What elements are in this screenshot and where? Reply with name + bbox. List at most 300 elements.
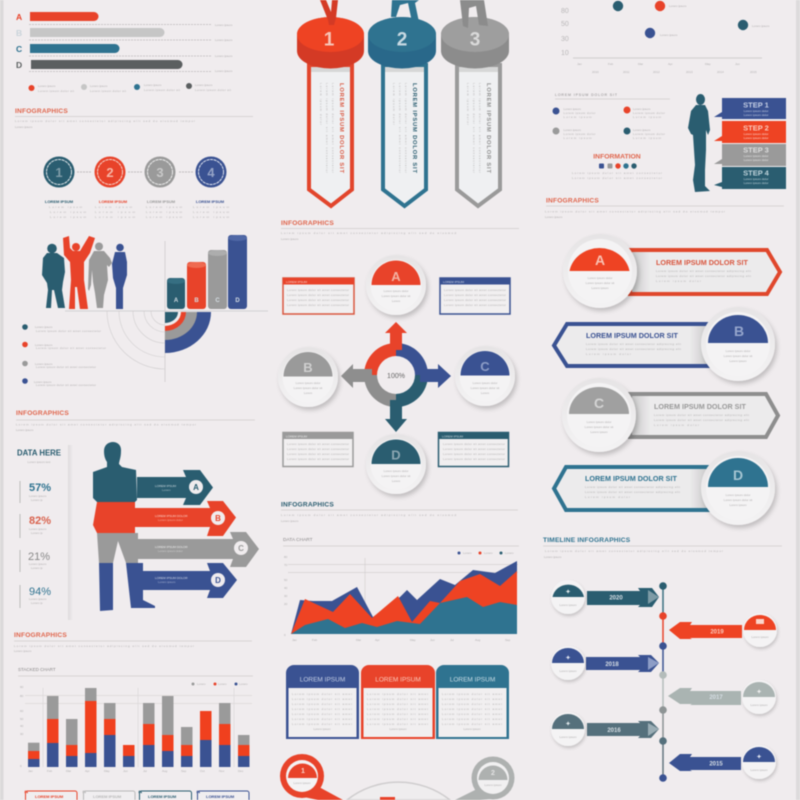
chart legend: Lorem xyxy=(197,682,206,686)
heading: infographics 6: Lorem ipsum xyxy=(545,215,563,219)
badge A xyxy=(366,255,426,315)
card teal: Lorem ipsum dolor sit amet xyxy=(442,702,502,706)
card red: Lorem ipsum dolor sit amet xyxy=(367,722,428,726)
arrow A: Lorem xyxy=(162,488,171,492)
title: data here: Lorem ipsum text xyxy=(27,460,51,464)
badge D: Lorem ipsum dolor sit xyxy=(382,474,410,478)
panel: area chart: 30 xyxy=(284,594,288,598)
card teal: LOREM IPSUM xyxy=(450,676,495,684)
standing silhouette xyxy=(688,94,710,192)
panel: banner A: Lorem ipsum dolor xyxy=(656,279,701,283)
panel: area chart: 40 xyxy=(284,586,288,590)
area series xyxy=(291,561,517,634)
panel: scatter chart: 50 xyxy=(561,21,569,28)
box gray: Lorem ipsum dolor sit amet consectetur xyxy=(287,457,349,461)
badge A: A xyxy=(595,252,605,268)
badge B: Lorem ipsum xyxy=(729,359,747,363)
arrow C: Lorem ipsum dolor xyxy=(158,549,183,553)
bar legend: Lorem ipsum dolor sit xyxy=(38,89,74,93)
man silhouette in four colour bands xyxy=(92,441,156,612)
box teal: LOREM IPSUM xyxy=(442,434,464,438)
stat 21% xyxy=(20,550,50,572)
panel: stacked chart: 50 xyxy=(20,717,24,721)
cylinder A xyxy=(167,278,185,309)
stat 82%: Lorem ip xyxy=(31,531,43,535)
heading: infographics 4 xyxy=(281,220,519,241)
sub heading xyxy=(555,93,670,99)
arrow down xyxy=(385,400,407,432)
badge B xyxy=(701,307,775,381)
panel: timeline xyxy=(551,580,777,782)
step 2: Lorem ipsum xyxy=(95,215,136,219)
badge A: Lorem ipsum xyxy=(591,286,609,290)
bar C: Lorem ipsum xyxy=(215,54,233,58)
title: data here xyxy=(17,448,61,464)
event 2017 xyxy=(668,680,776,714)
event 2015: ✦ xyxy=(756,753,762,761)
card teal: Lorem ipsum dolor sit amet xyxy=(442,697,502,701)
step 3: Lorem ipsum xyxy=(146,215,182,219)
arrow D: LOREM IPSUM DOLOR xyxy=(155,576,188,580)
step 2: LOREM IPSUM xyxy=(99,199,128,204)
heading: infographics 2: Lorem ipsum xyxy=(16,428,34,432)
stat 57%: 57% xyxy=(29,482,51,494)
panel: area chart: 20 xyxy=(284,602,288,606)
stat 57%: Lorem ipsum xyxy=(29,494,47,498)
timeline axis and dots xyxy=(659,582,667,782)
stat 82%: 82% xyxy=(29,515,51,527)
card teal: Lorem ipsum dolor sit amet xyxy=(442,722,502,726)
event 2018: Lorem ipsum xyxy=(559,669,577,673)
heading: infographics 1: Lorem ipsum dolor sit amet consectetur adipiscing elit sed do eiusmod tempor xyxy=(15,119,195,123)
badge B: Lorem ipsum dolor sit xyxy=(294,386,322,390)
bar C: C xyxy=(16,44,22,54)
information block xyxy=(572,154,662,180)
heading: infographics 1 xyxy=(15,108,253,129)
step 3: Lorem ipsum xyxy=(146,210,182,214)
event 2020: Lorem ipsum xyxy=(559,603,577,607)
badge C xyxy=(562,378,636,452)
step 4: Lorem ipsum dolor xyxy=(744,177,768,181)
step 2: Lorem ipsum dolor xyxy=(744,132,768,136)
badge A: Lorem xyxy=(392,299,401,303)
panel: stacked chart: Jul xyxy=(143,769,147,773)
badge A: Lorem ipsum dolor sit xyxy=(382,294,410,298)
stat 82%: Lorem ipsum xyxy=(29,527,47,531)
panel: area chart: Jul xyxy=(450,638,454,642)
four item legend: Lorem ipsum dolor xyxy=(633,111,665,115)
card navy: Lorem ipsum dolor sit amet xyxy=(292,722,352,726)
heading: infographics 6: Lorem ipsum dolor sit amet consectetur adipiscing elit sed do eiusmod tempor xyxy=(545,210,725,214)
quote gray: “ xyxy=(82,789,86,799)
step 1: Lorem ipsum xyxy=(50,210,86,214)
box red: Lorem ipsum dolor sit amet consectetur xyxy=(287,303,349,307)
step 1 xyxy=(44,156,86,219)
step 1: Lorem ipsum xyxy=(49,205,82,209)
badge B: Lorem ipsum dolor xyxy=(296,381,320,385)
badge C: C xyxy=(594,395,604,411)
step 4: Lorem ipsum xyxy=(193,215,230,219)
panel: legend and steps xyxy=(552,93,786,192)
panel: banner C: Lorem ipsum dolor sit amet consectetur adipiscing elit xyxy=(654,418,749,422)
step 3: LOREM IPSUM xyxy=(147,199,176,204)
cylinder D xyxy=(228,235,247,309)
event 2020: 2020 xyxy=(609,596,623,602)
card navy: Lorem ipsum dolor sit amet xyxy=(292,692,352,696)
panel: stacked chart: 60 xyxy=(20,709,24,713)
arrow D: Lorem ipsum xyxy=(158,580,176,584)
heading: timeline infographics: Lorem ipsum xyxy=(544,555,562,559)
red pin xyxy=(280,754,343,800)
figures standing on podiums xyxy=(320,0,488,28)
card teal: Lorem ipsum dolor sit amet xyxy=(442,717,502,721)
heading: infographics 4: Lorem ipsum xyxy=(281,237,299,241)
panel: scatter chart: Feb xyxy=(608,62,614,66)
red pin: 1 xyxy=(301,768,305,775)
heading: infographics 4: INFOGRAPHICS xyxy=(281,220,334,227)
box navy: Lorem ipsum dolor sit amet consectetur xyxy=(444,293,506,297)
bar legend: Lorem ipsum xyxy=(144,83,162,87)
panel: stacked chart: May xyxy=(104,769,110,773)
card red: Lorem ipsum dolor sit amet xyxy=(367,697,428,701)
box red: Lorem ipsum dolor sit amet consectetur xyxy=(287,293,349,297)
scatter dots: Lorem ipsum xyxy=(660,33,678,37)
box navy: LOREM IPSUM xyxy=(443,280,465,284)
card teal: Lorem ipsum dolor sit amet xyxy=(442,707,502,711)
stat 21%: Lorem ipsum xyxy=(29,562,47,566)
panel: banner A: LOREM IPSUM DOLOR SIT xyxy=(656,258,748,267)
panel: scatter chart: Jun xyxy=(735,62,740,66)
panel: stacked chart: Mar xyxy=(66,769,71,773)
panel: quote boxes xyxy=(24,789,249,800)
step 1: Lorem ipsum xyxy=(50,215,86,219)
quote teal: LOREM IPSUM xyxy=(148,794,177,799)
bar legend: Lorem ipsum dolor sit xyxy=(195,88,231,92)
four item legend: Lorem ipsum xyxy=(633,136,662,140)
arc legend: Lorem ipsum dolor sit amet consectetur xyxy=(36,329,101,333)
panel: stacked chart: 30 xyxy=(20,732,24,736)
area legend: Lorem xyxy=(463,551,472,555)
card red: Lorem ipsum dolor sit amet xyxy=(367,712,428,716)
event 2017: 2017 xyxy=(709,695,723,701)
arrow B: B xyxy=(215,514,221,523)
step 4: STEP 4 xyxy=(743,168,770,178)
quote red xyxy=(24,789,77,800)
information block: Lorem ipsum dolor sit amet consectetur xyxy=(572,176,662,180)
quote gray: LOREM IPSUM xyxy=(93,794,122,799)
quote gray xyxy=(82,789,135,800)
gray pin: Lorem ipsum xyxy=(484,783,502,787)
event 2018: ✦ xyxy=(565,654,571,662)
stat 21%: 21% xyxy=(28,551,50,563)
box teal: Lorem ipsum dolor sit amet consectetur xyxy=(443,452,505,456)
tag 2: 2 xyxy=(397,30,407,50)
four item legend: Lorem ipsum xyxy=(564,107,581,111)
panel: banner B: Lorem ipsum dolor xyxy=(586,352,631,356)
stat 57%: Lorem ip xyxy=(31,498,43,502)
step 1: Lorem ipsum dolor xyxy=(744,109,768,113)
heading: infographics 6: INFOGRAPHICS xyxy=(546,198,599,204)
step 2: 2 xyxy=(106,165,114,180)
panel: scatter chart: 2013 xyxy=(686,70,693,74)
badge D: Lorem ipsum dolor xyxy=(726,493,750,497)
panel: banner D: LOREM IPSUM DOLOR SIT xyxy=(585,474,677,483)
step 2: Lorem ipsum xyxy=(95,205,132,209)
badge D: D xyxy=(733,467,743,483)
quarter arc chart xyxy=(107,311,211,369)
heading: timeline infographics: TIMELINE INFOGRAPHICS xyxy=(543,537,631,544)
bar legend xyxy=(28,83,231,93)
step 2 xyxy=(714,121,786,143)
panel: man with arrows xyxy=(85,438,259,613)
card navy xyxy=(286,665,359,739)
panel: stacked chart xyxy=(18,667,253,773)
arrow left xyxy=(341,364,372,388)
event 2019: Lorem ipsum xyxy=(751,635,769,639)
panel: banner D: Lorem ipsum dolor sit amet consectetur adipiscing elit xyxy=(585,485,680,489)
card navy: Lorem ipsum dolor sit amet xyxy=(292,717,352,721)
box teal: Lorem ipsum dolor sit amet consectetur xyxy=(443,447,505,451)
panel: people, cylinders and arcs xyxy=(22,235,268,387)
panel: stacked chart: Feb xyxy=(47,769,53,773)
step 4: Lorem ipsum dolor xyxy=(744,181,768,185)
card red: Lorem ipsum dolor sit amet xyxy=(367,692,428,696)
step 4 xyxy=(193,156,230,219)
box red: Lorem ipsum dolor sit amet consectetur xyxy=(287,298,349,302)
chart legend: Lorem xyxy=(239,682,248,686)
panel: banner B: LOREM IPSUM DOLOR SIT xyxy=(586,331,678,340)
bar B xyxy=(16,28,233,42)
bar B: B xyxy=(16,28,22,38)
step 3: Lorem ipsum xyxy=(146,205,182,209)
panel: circular process xyxy=(278,255,515,494)
stat 21%: Lorem ip xyxy=(31,566,43,570)
panel: area chart: Jun xyxy=(430,638,435,642)
card navy: Lorem ipsum dolor sit amet xyxy=(292,712,352,716)
tag 1: Lorem ipsum dolor sit amet consectetur xyxy=(325,83,329,173)
step 2: Lorem ipsum dolor xyxy=(744,136,768,140)
box gray: Lorem ipsum dolor sit amet consectetur xyxy=(287,442,349,446)
panel: stacked chart: Apr xyxy=(85,769,90,773)
event 2016: 2016 xyxy=(607,728,621,734)
panel: scatter chart: 2011 xyxy=(623,70,630,74)
ring with four arrows xyxy=(341,322,451,432)
panel: area chart: Aug xyxy=(475,638,481,642)
red pin: Lorem ipsum xyxy=(293,781,311,785)
panel: area chart: 0 xyxy=(284,633,286,637)
arc legend: Lorem ipsum dolor sit amet consectetur xyxy=(36,346,106,350)
panel: banner B: Lorem ipsum dolor sit amet consectetur adipiscing elit xyxy=(586,347,681,351)
panel: scatter chart: Apr xyxy=(668,62,673,66)
tag 1: 1 xyxy=(324,30,335,50)
arrow A: A xyxy=(193,483,199,492)
quote red: “ xyxy=(24,789,28,799)
tag 3: Lorem ipsum dolor sit amet consectetur xyxy=(478,83,482,173)
arrow up xyxy=(385,322,407,350)
panel: banner A: Lorem ipsum dolor sit amet consectetur adipiscing elit xyxy=(656,269,751,273)
panel: stacked chart: Sep xyxy=(181,769,187,773)
event 2017: ✦ xyxy=(756,688,762,696)
heading: infographics 2: Lorem ipsum dolor sit amet consectetur adipiscing elit sed do eiusmod tempor xyxy=(16,422,196,426)
panel: scatter chart: 2012 xyxy=(653,70,660,74)
tag 3: Lorem ipsum dolor xyxy=(466,83,470,125)
panel: scatter chart: 2010 xyxy=(592,70,599,74)
bar legend: Lorem ipsum xyxy=(195,83,213,87)
tag 1: Lorem ipsum dolor sit amet consectetur xyxy=(331,83,335,173)
card navy: Lorem ipsum dolor sit amet xyxy=(292,697,352,701)
event 2017: Lorem ipsum xyxy=(750,703,768,707)
panel: banner C xyxy=(562,378,778,452)
badge C: Lorem ipsum dolor sit xyxy=(471,386,500,390)
panel: three cards xyxy=(286,665,509,739)
event 2016: ✦ xyxy=(565,720,571,728)
step 4 xyxy=(714,167,786,189)
silhouettes of four people xyxy=(42,236,127,309)
card red xyxy=(361,665,435,739)
heading: infographics 5 xyxy=(281,502,518,523)
card red: Lorem ipsum dolor sit amet xyxy=(367,717,428,721)
heading: infographics 6 xyxy=(545,198,784,219)
badge A: Lorem ipsum dolor sit xyxy=(586,281,614,285)
bar D: Lorem ipsum xyxy=(215,69,233,73)
step 4: 4 xyxy=(207,165,215,180)
bar C xyxy=(16,44,233,58)
gray pin: 2 xyxy=(491,770,495,777)
area legend: Lorem xyxy=(484,551,493,555)
card red: Lorem ipsum xyxy=(389,727,407,731)
four item legend: Lorem ipsum xyxy=(633,107,651,111)
bar D xyxy=(16,60,233,73)
box red xyxy=(283,278,354,314)
box teal: Lorem ipsum dolor sit amet consectetur xyxy=(443,442,505,446)
event 2020: ✦ xyxy=(565,588,571,596)
panel: banner D: Lorem ipsum dolor xyxy=(585,495,630,499)
tag 2: Lorem ipsum dolor sit amet consectetur xyxy=(398,83,402,173)
panel: stacked chart: Aug xyxy=(162,769,168,773)
badge C xyxy=(455,346,515,406)
event 2019: 2019 xyxy=(710,630,724,636)
card teal xyxy=(436,665,509,739)
step 4: Lorem ipsum xyxy=(193,210,230,214)
step 3 xyxy=(714,144,786,166)
panel: area chart: 70 xyxy=(284,563,288,567)
badge B: Lorem xyxy=(304,391,313,395)
large centre badge xyxy=(347,782,450,800)
heading: infographics 3: Lorem ipsum dolor sit amet consectetur adipiscing elit sed do eiusmod tempor xyxy=(14,644,194,648)
tag 1: Lorem ipsum dolor xyxy=(319,83,323,125)
box gray xyxy=(283,432,353,466)
panel: area chart: Feb xyxy=(312,638,318,642)
four item legend: Lorem ipsum xyxy=(564,115,592,119)
gray pin xyxy=(455,756,514,800)
panel: scatter chart: 80 xyxy=(561,8,569,15)
area legend: Lorem xyxy=(505,551,514,555)
arc legend: Lorem ipsum xyxy=(35,325,53,329)
arrow B xyxy=(135,501,236,536)
panel: area chart: DATA CHART xyxy=(283,537,313,543)
badge B: Lorem ipsum dolor xyxy=(726,349,750,353)
arrow D: D xyxy=(215,576,221,585)
panel: bottom pins xyxy=(280,754,514,800)
box navy xyxy=(440,278,510,314)
card red: Lorem ipsum dolor sit amet xyxy=(367,702,428,706)
box navy: Lorem ipsum dolor sit amet consectetur xyxy=(444,288,506,292)
tag 2: Lorem ipsum dolor xyxy=(392,83,396,125)
panel: area chart: Jan xyxy=(292,638,297,642)
heading: timeline infographics xyxy=(543,537,782,559)
scatter dots: Lorem ipsum xyxy=(669,4,687,8)
cylinder D: D xyxy=(235,298,240,304)
panel: banner D xyxy=(554,451,775,525)
panel: area chart xyxy=(283,537,519,642)
panel: data here percentages xyxy=(17,445,73,620)
arrow B: Lorem ipsum dolor xyxy=(158,518,183,522)
four item legend: Lorem ipsum xyxy=(633,128,651,132)
badge B xyxy=(278,347,338,407)
panel: stacked chart: Nov xyxy=(219,769,225,773)
step 2: STEP 2 xyxy=(743,124,769,132)
box red: LOREM IPSUM xyxy=(286,280,308,284)
panel: stacked chart: 40 xyxy=(20,724,24,728)
cylinder B xyxy=(187,262,206,309)
four item legend: Lorem ipsum dolor xyxy=(564,111,596,115)
box gray: Lorem ipsum dolor sit amet consectetur xyxy=(287,447,349,451)
step 1: LOREM IPSUM xyxy=(45,199,74,204)
panel: banner B: Lorem ipsum dolor sit amet consectetur adipiscing elit xyxy=(586,342,681,346)
step 3: 3 xyxy=(156,165,164,180)
heading: infographics 1: INFOGRAPHICS xyxy=(15,108,68,115)
bar legend: Lorem ipsum xyxy=(90,84,108,88)
tag 2 xyxy=(368,17,436,206)
box gray: Lorem ipsum dolor sit amet consectetur xyxy=(287,452,349,456)
card teal: Lorem ipsum xyxy=(463,727,481,731)
heading: infographics 2: INFOGRAPHICS xyxy=(16,410,69,417)
quote navy: “ xyxy=(196,789,200,799)
quote navy: LOREM IPSUM xyxy=(206,794,235,799)
event 2020 xyxy=(551,580,659,614)
badge A: Lorem ipsum dolor xyxy=(588,276,612,280)
arc legend: Lorem ipsum xyxy=(35,343,53,347)
heading: timeline infographics: Lorem ipsum dolor sit amet consectetur adipiscing elit sed do eiusmod tempor xyxy=(545,549,723,553)
badge C: Lorem ipsum dolor xyxy=(587,420,611,424)
stat 94%: Lorem ipsum xyxy=(29,597,47,601)
heading: infographics 4: Lorem ipsum dolor sit amet consectetur adipiscing elit sed do eiusmod xyxy=(281,231,456,235)
event 2015: 2015 xyxy=(709,762,723,768)
stat 94% xyxy=(20,585,51,608)
heading: infographics 2 xyxy=(16,410,255,432)
arrow C: LOREM IPSUM DOLOR xyxy=(155,545,188,549)
card navy: Lorem ipsum dolor sit amet xyxy=(292,707,352,711)
event 2015 xyxy=(669,745,776,779)
arrow C: C xyxy=(238,544,244,553)
step 3: Lorem ipsum dolor xyxy=(744,158,768,162)
panel: banner C: LOREM IPSUM DOLOR SIT xyxy=(654,402,746,411)
badge D: D xyxy=(391,448,401,462)
badge C: Lorem ipsum dolor sit xyxy=(585,425,614,429)
cylinder B: B xyxy=(194,298,199,304)
four item legend: Lorem ipsum xyxy=(564,128,581,132)
panel: scatter chart: Jan xyxy=(577,62,582,66)
bar A: Lorem ipsum xyxy=(215,23,233,27)
card navy: Lorem ipsum xyxy=(313,727,331,731)
center 100%: 100% xyxy=(387,373,405,380)
card navy: LOREM IPSUM xyxy=(300,676,345,684)
box navy: Lorem ipsum dolor sit amet consectetur xyxy=(444,298,506,302)
step 3: STEP 3 xyxy=(743,146,769,154)
box teal: Lorem ipsum dolor sit amet consectetur xyxy=(443,457,505,461)
badge B: B xyxy=(734,323,744,339)
panel: banner A: Lorem ipsum dolor sit amet consectetur adipiscing elit xyxy=(656,274,751,278)
